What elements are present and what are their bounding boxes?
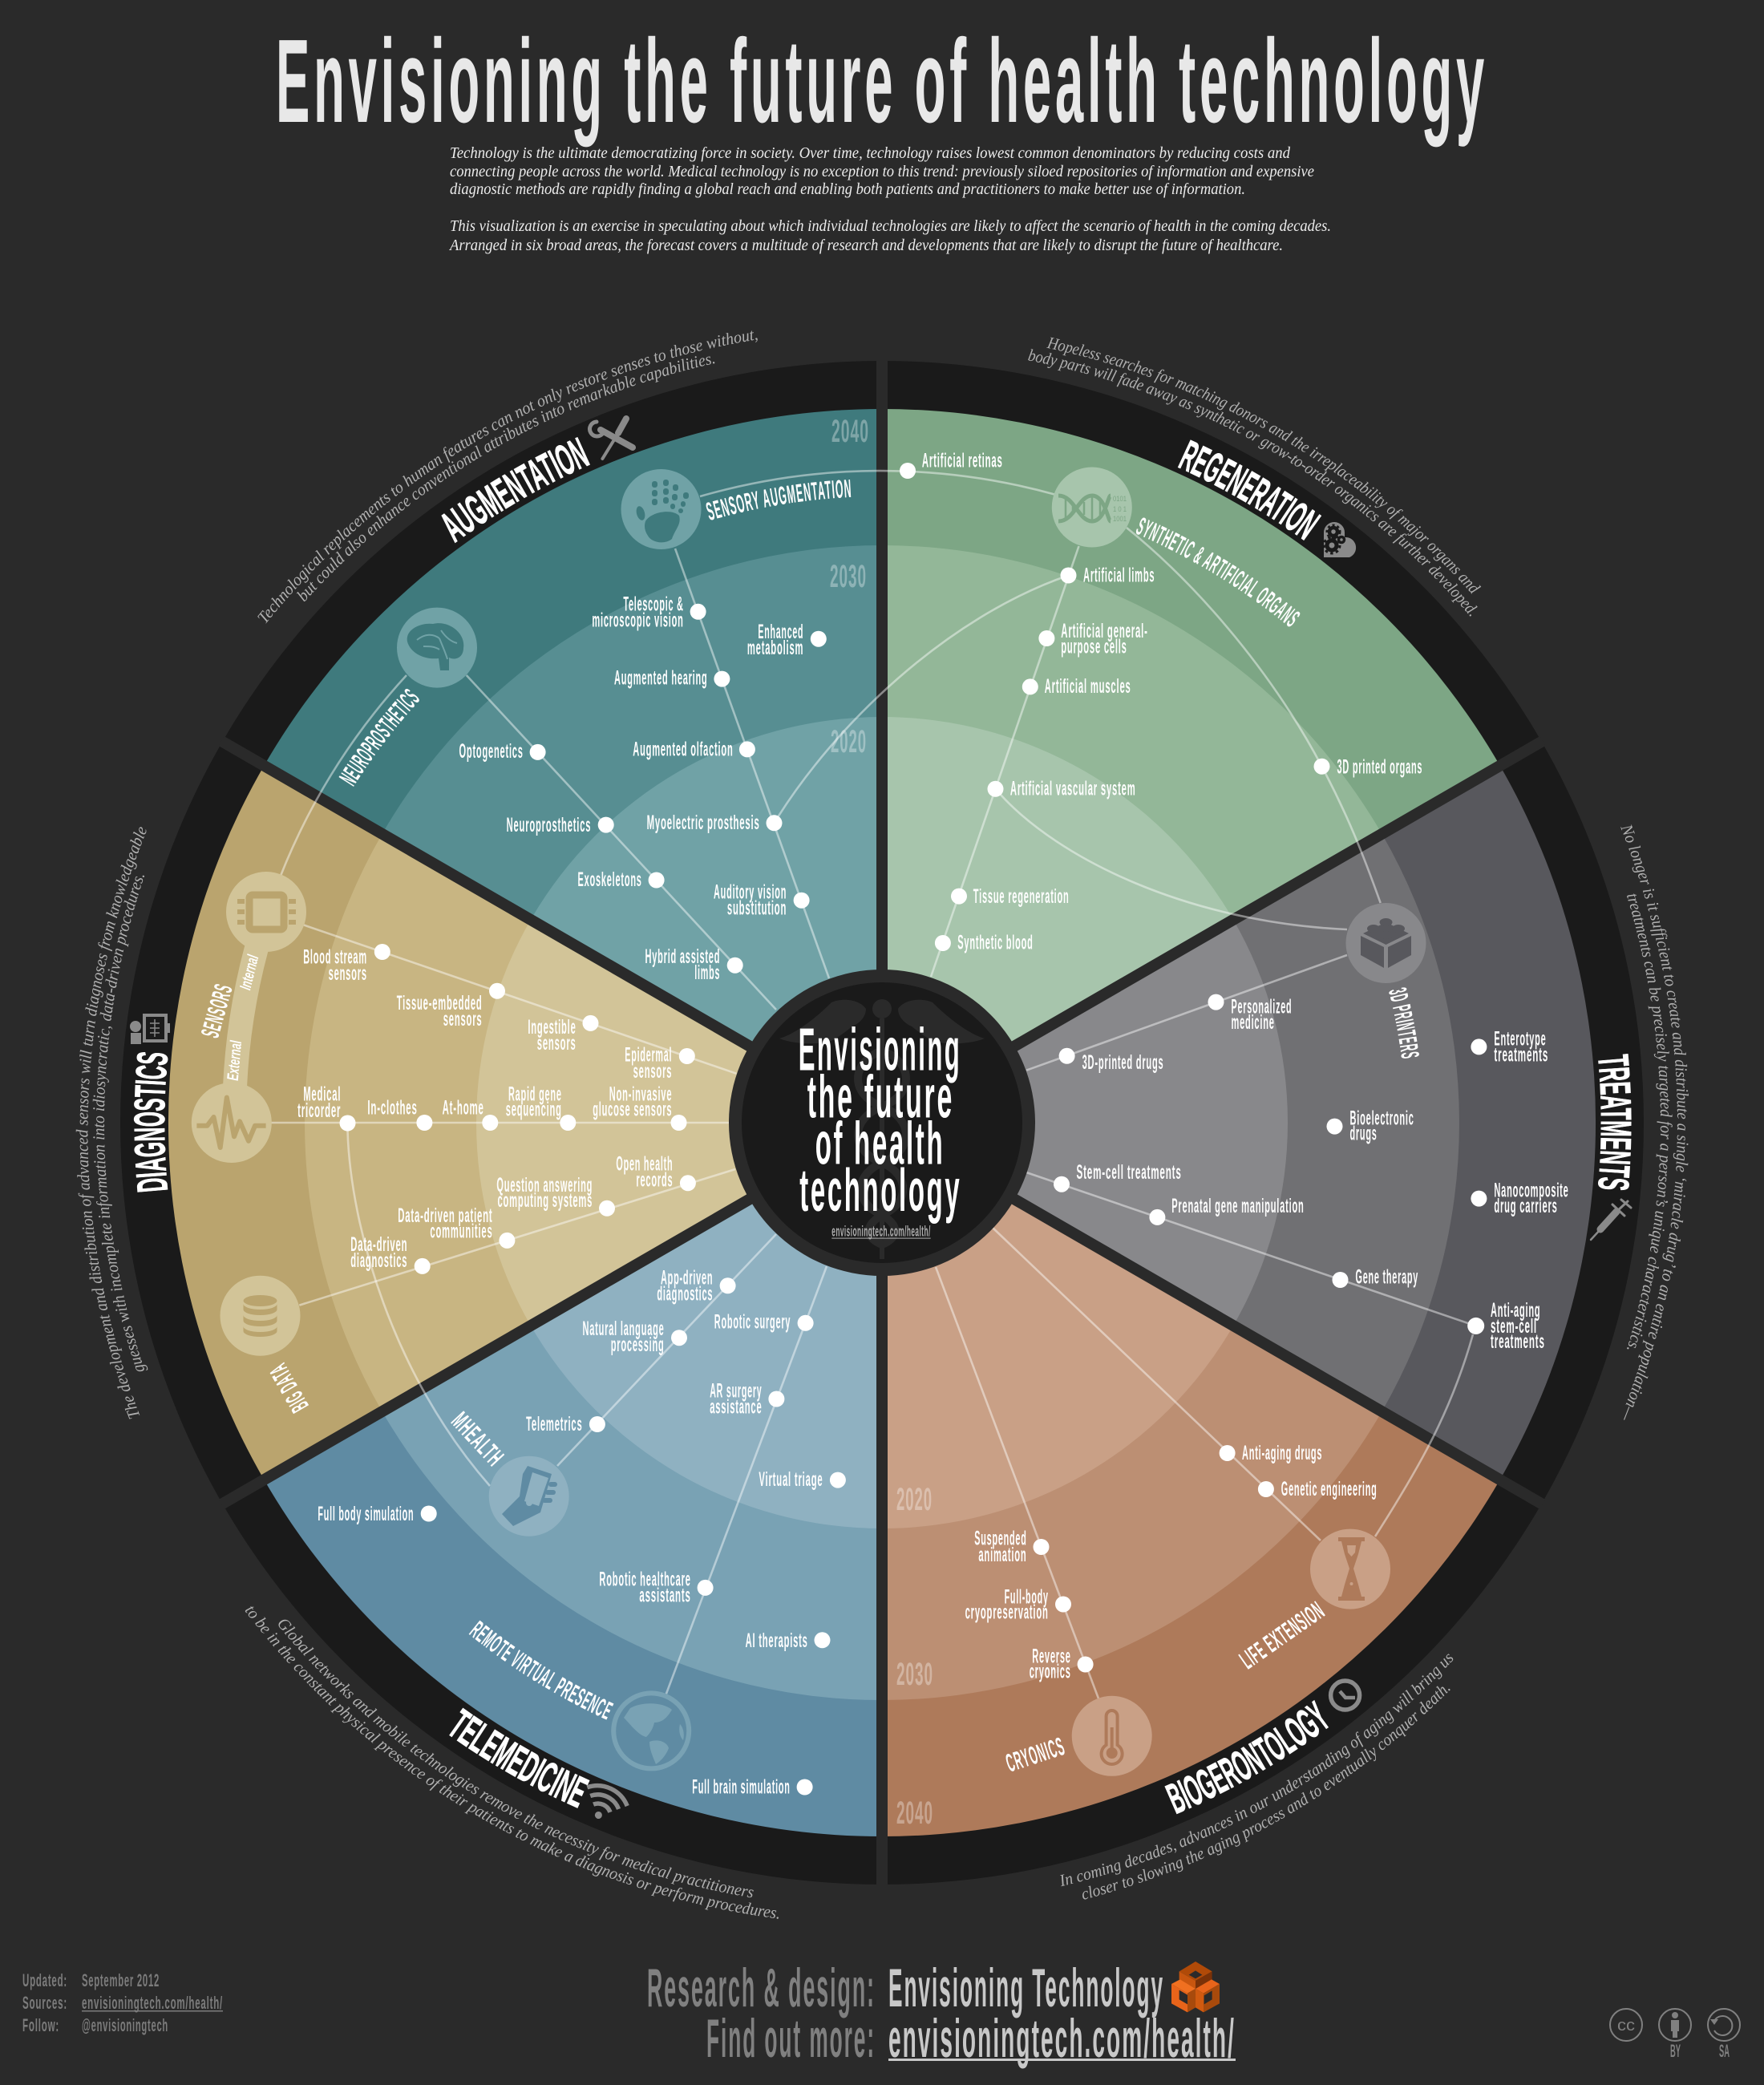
description: augmentation: but could also enhance conventional attributes into remarkable capabilities. xyxy=(297,356,715,601)
node: synthetic blood xyxy=(935,932,1034,954)
node: app-driven diagnostics xyxy=(657,1267,736,1306)
footer: credits xyxy=(647,1957,1236,2069)
node: non-invasive glucose sensors xyxy=(593,1083,686,1131)
footer: credits: Find out more: xyxy=(706,2008,876,2069)
node: augmented hearing xyxy=(614,667,730,690)
nodes: augmentation xyxy=(459,593,827,984)
nodes: treatments: treatments xyxy=(1491,1330,1545,1353)
node: reverse cryonics: Reverse xyxy=(1032,1646,1071,1668)
node: telemetrics xyxy=(526,1413,605,1435)
icon: creative commons license xyxy=(1610,2009,1740,2061)
icon: ecg wave xyxy=(192,1083,272,1163)
node: ar surgery assistance: assistance xyxy=(710,1395,762,1418)
year labels: 2030 xyxy=(830,559,867,594)
intro text: This visualization is an exercise in speculating about which individual technologies are likely to affect the scenario of health in the coming decades. xyxy=(450,217,1331,235)
node: natural language processing xyxy=(582,1318,687,1356)
node: 3d printed organs xyxy=(1313,755,1422,778)
node: ingestible sensors: Ingestible xyxy=(528,1016,577,1038)
nodes: treatments: Prenatal gene manipulation xyxy=(1171,1195,1305,1217)
footer: metadata: Follow: xyxy=(22,2015,59,2035)
band label: internal: Internal xyxy=(237,953,262,992)
section: telemedicine heading: TELEMEDICINE xyxy=(449,1708,590,1808)
nodes: regeneration: Artificial muscles xyxy=(1045,675,1131,698)
nodes: treatments: 3D-printed drugs xyxy=(1082,1051,1164,1074)
description: diagnostics: guesses with incomplete information into idiosyncratic, data-driven procedures. xyxy=(93,876,148,1371)
intro text: Technology is the ultimate democratizing force in society. Over time, technology raises lowest common denominators by reducing costs and xyxy=(450,144,1291,162)
icon: globe (remote virtual presence) xyxy=(611,1690,691,1771)
node: epidermal sensors xyxy=(625,1044,695,1083)
icon: clock xyxy=(1331,1681,1360,1710)
node: epidermal sensors: sensors xyxy=(633,1060,672,1083)
node: data-driven diagnostics xyxy=(350,1233,431,1274)
node: natural language processing: Natural language xyxy=(582,1318,665,1340)
node: data-driven patient communities: Data-driven patient xyxy=(398,1204,492,1227)
node: tissue-embedded sensors: sensors xyxy=(443,1008,483,1030)
node: enhanced metabolism xyxy=(747,621,827,659)
node: nanocomposite drug carriers xyxy=(1471,1179,1569,1217)
node: augmented hearing: Augmented hearing xyxy=(614,667,707,690)
center hub: envisioningtech.com/health/ xyxy=(831,1224,931,1240)
node: hybrid assisted limbs xyxy=(645,945,743,984)
node: personalized medicine: medicine xyxy=(1232,1011,1275,1034)
node: artificial retinas xyxy=(900,449,1003,479)
node: suspended animation xyxy=(974,1527,1049,1566)
description: telemedicine: Global networks and mobile technologies remove the necessity for medical practitioners xyxy=(279,1620,754,1897)
outer black ring xyxy=(120,361,1644,1885)
icon: thermometer (cryonics) xyxy=(1072,1696,1152,1776)
icon: cc: cc xyxy=(1617,2017,1635,2034)
node: telescopic and microscopic vision xyxy=(592,593,706,632)
nodes: treatments: Bioelectronic xyxy=(1350,1107,1414,1129)
node: rapid gene sequencing xyxy=(506,1083,576,1131)
node: optogenetics: Optogenetics xyxy=(459,740,524,763)
nodes: regeneration: Tissue regeneration xyxy=(973,885,1070,908)
node: bioelectronic drugs: drugs xyxy=(1350,1122,1378,1144)
section: diagnostics heading: DIAGNOSTICS xyxy=(133,1052,168,1192)
text: 2020 xyxy=(896,1482,933,1517)
node: full brain simulation xyxy=(692,1775,813,1798)
nodes: treatments: treatments xyxy=(1494,1043,1548,1066)
icon: wifi xyxy=(577,1779,631,1828)
node: reverse cryonics: cryonics xyxy=(1030,1660,1071,1682)
node: suspended animation: Suspended xyxy=(974,1527,1027,1549)
wedge: treatments xyxy=(882,766,1596,1480)
node: open health records: Open health xyxy=(616,1153,673,1176)
section: regeneration heading: REGENERATION xyxy=(1177,439,1321,540)
node: artificial general-purpose cells: purpose cells xyxy=(1061,635,1127,658)
node: ai therapists: AI therapists xyxy=(746,1630,808,1652)
node: blood stream sensors xyxy=(303,944,390,985)
section: biogerontology heading: BIOGERONTOLOGY xyxy=(1164,1700,1329,1814)
node: data-driven diagnostics: diagnostics xyxy=(350,1249,407,1272)
node: ai therapists xyxy=(746,1630,831,1652)
center url xyxy=(831,1224,931,1240)
section: treatments heading: TREATMENTS xyxy=(1598,1054,1632,1190)
text: LIFE EXTENSION xyxy=(1235,1596,1329,1674)
nodes: regeneration: Synthetic blood xyxy=(957,932,1034,954)
node: full body simulation: Full body simulation xyxy=(318,1503,414,1525)
branch label: 3d printers: 3D PRINTERS xyxy=(1389,987,1419,1059)
node: ingestible sensors xyxy=(528,1015,598,1055)
node: data-driven patient communities xyxy=(398,1204,515,1249)
branch label: synthetic and artificial organs: SYNTHETIC & ARTIFICIAL ORGANS xyxy=(1135,518,1301,627)
branch label: neuroprosthetics: NEUROPROSTHETICS xyxy=(338,689,419,787)
node: anti-aging drugs xyxy=(1220,1442,1322,1464)
node: data-driven patient communities: communities xyxy=(430,1221,492,1243)
node: anti-aging stem-cell treatments: stem-cell xyxy=(1491,1315,1537,1338)
node: augmented olfaction: Augmented olfaction xyxy=(633,738,733,760)
node: full body simulation xyxy=(318,1503,437,1525)
node: full-body cryopreservation xyxy=(965,1586,1071,1623)
icon: caduceus xyxy=(779,999,985,1259)
icon: by: BY xyxy=(1670,2041,1681,2061)
branch label: remote virtual presence: REMOTE VIRTUAL PRESENCE xyxy=(468,1620,614,1719)
node: hybrid assisted limbs: Hybrid assisted xyxy=(645,945,720,968)
icon: sa: SA xyxy=(1719,2041,1730,2061)
description: diagnostics: The development and distribution of advanced sensors will turn diagnoses from knowledgeable xyxy=(75,827,146,1419)
center hub: of health xyxy=(815,1110,945,1177)
icon: database (big data) xyxy=(220,1276,300,1356)
node: open health records xyxy=(616,1153,696,1192)
text: 2030 xyxy=(896,1657,933,1692)
nodes: biogerontology xyxy=(965,1442,1378,1682)
text: Envisioning Technology xyxy=(888,1957,1164,2018)
nodes: regeneration: Artificial limbs xyxy=(1083,565,1155,587)
description: biogerontology: In coming decades, advances in our understanding of aging will bring us xyxy=(1060,1654,1453,1886)
node: virtual triage xyxy=(759,1468,846,1491)
nodes: treatments: Stem-cell treatments xyxy=(1076,1161,1182,1184)
nodes: treatments: Gene therapy xyxy=(1355,1265,1418,1288)
wedge: regeneration xyxy=(882,409,1500,1123)
icon: hand (sensory augmentation) xyxy=(621,469,701,549)
node: prenatal gene manipulation xyxy=(1149,1195,1305,1225)
wedge: augmentation xyxy=(264,409,882,1123)
text: SENSORS xyxy=(196,981,238,1041)
center hub: the future xyxy=(807,1063,954,1130)
node: at-home xyxy=(443,1097,498,1131)
wedge: biogerontology xyxy=(882,1123,1500,1836)
node: blood stream sensors: Blood stream xyxy=(303,946,367,969)
footer: metadata: Sources: xyxy=(22,1993,67,2013)
node: tissue-embedded sensors: Tissue-embedded xyxy=(397,992,483,1014)
node: blood stream sensors: sensors xyxy=(329,962,367,985)
node: exoskeletons xyxy=(577,868,665,891)
icon: dna helix (synthetic organs): 1001 xyxy=(1113,515,1127,523)
node: app-driven diagnostics: App-driven xyxy=(661,1267,713,1289)
text: Genetic engineering xyxy=(1281,1478,1378,1500)
sensors connecting band xyxy=(235,948,257,1087)
node: personalized medicine xyxy=(1208,994,1292,1034)
footer: metadata: @envisioningtech xyxy=(82,2015,168,2035)
text: envisioningtech.com/health/ xyxy=(888,2008,1236,2069)
node: non-invasive glucose sensors: glucose sensors xyxy=(593,1098,672,1120)
node: artificial vascular system xyxy=(988,777,1135,800)
year labels: 2040 xyxy=(831,414,869,449)
intro text xyxy=(448,144,1331,254)
node: question answering computing systems: Question answering xyxy=(496,1174,593,1196)
node: anti-aging stem-cell treatments xyxy=(1467,1299,1545,1353)
footer: metadata: Updated: xyxy=(22,1970,67,1990)
node: neuroprosthetics xyxy=(507,814,614,836)
nodes: treatments xyxy=(1054,994,1569,1353)
node: ar surgery assistance xyxy=(710,1379,784,1418)
node: full-body cryopreservation: Full-body xyxy=(1005,1586,1049,1609)
icon: heart with gears xyxy=(1324,522,1356,557)
node: ar surgery assistance: AR surgery xyxy=(710,1379,762,1402)
nodes: regeneration: Artificial vascular system xyxy=(1010,777,1135,800)
text: CRYONICS xyxy=(1002,1731,1069,1778)
icon: lego brick (3d printers) xyxy=(1345,903,1426,983)
wedge: diagnostics xyxy=(168,766,882,1480)
intro text: diagnostic methods are rapidly finding a global reach and enabling both patients and practitioners to make better use of information. xyxy=(450,180,1245,198)
node: reverse cryonics xyxy=(1030,1646,1094,1682)
node: bioelectronic drugs xyxy=(1326,1107,1414,1144)
node: rapid gene sequencing: Rapid gene xyxy=(508,1083,562,1105)
node: robotic healthcare assistants: Robotic healthcare xyxy=(599,1569,691,1591)
node: augmented olfaction xyxy=(633,738,755,760)
node: medical tricorder xyxy=(297,1083,356,1131)
node: enhanced metabolism: Enhanced xyxy=(758,621,803,643)
node: myoelectric prosthesis xyxy=(647,812,783,834)
node: robotic surgery: Robotic surgery xyxy=(714,1311,791,1334)
nodes: regeneration: Artificial retinas xyxy=(922,449,1003,472)
footer: metadata: September 2012 xyxy=(82,1970,160,1990)
icon: tools xyxy=(590,419,633,459)
node: myoelectric prosthesis: Myoelectric prosthesis xyxy=(647,812,760,834)
icon: phone in hand (mhealth) xyxy=(489,1456,569,1536)
icon: syringe xyxy=(1591,1200,1631,1240)
footer: metadata xyxy=(22,1970,223,2035)
node: in-clothes xyxy=(367,1097,432,1131)
icon: envisioning technology logo xyxy=(1171,1962,1220,2012)
node: tissue regeneration xyxy=(951,885,1070,908)
center title xyxy=(799,1015,961,1224)
node: medical tricorder: Medical xyxy=(303,1083,341,1105)
description: treatments: treatments can be precisely targeted for a person’s unique characteristics. xyxy=(1627,893,1673,1349)
description: biogerontology: closer to slowing the aging process and to eventually conquer death. xyxy=(1082,1686,1450,1899)
node: open health records: records xyxy=(636,1169,673,1192)
center hub: Envisioning xyxy=(799,1015,961,1083)
description: regeneration: body parts will fade away as synthetic or grow-to-order organics are further developed. xyxy=(1028,349,1478,616)
description: telemedicine: to be in the constant physical presence of their patients to make a diagnosis or perform procedures. xyxy=(245,1606,779,1919)
footer: credits: Research & design: xyxy=(647,1957,876,2018)
nodes: telemedicine xyxy=(318,1267,846,1798)
text: Nanocomposite xyxy=(1494,1179,1569,1201)
text: 2040 xyxy=(896,1796,933,1831)
center hub xyxy=(729,970,1035,1276)
year labels: 2020 xyxy=(831,724,867,759)
node: stem-cell treatments xyxy=(1054,1161,1182,1192)
node: data-driven diagnostics: Data-driven xyxy=(350,1233,407,1256)
node: optogenetics xyxy=(459,740,546,763)
nodes: treatments: Personalized xyxy=(1232,996,1292,1018)
icon: dna helix (synthetic organs): 0101 xyxy=(1113,495,1127,503)
node: auditory vision substitution xyxy=(714,881,810,919)
node: question answering computing systems: computing systems xyxy=(497,1189,593,1212)
icon: sa xyxy=(1708,2009,1740,2061)
node: ingestible sensors: sensors xyxy=(537,1032,577,1055)
node: robotic healthcare assistants: assistants xyxy=(639,1585,691,1607)
footer: metadata: envisioningtech.com/health/ xyxy=(82,1993,223,2013)
node: robotic healthcare assistants xyxy=(599,1569,714,1607)
node: artificial limbs xyxy=(1060,565,1155,587)
text: BIG DATA xyxy=(263,1358,314,1417)
node: robotic surgery xyxy=(714,1311,814,1334)
text: 3D printed organs xyxy=(1337,755,1422,778)
node: medical tricorder: tricorder xyxy=(297,1099,341,1122)
nodes: regeneration xyxy=(900,449,1422,954)
node: in-clothes: In-clothes xyxy=(367,1097,418,1119)
node: tissue-embedded sensors xyxy=(397,983,505,1030)
icon: brain (neuroprosthetics) xyxy=(397,608,477,688)
node: enterotype treatments xyxy=(1471,1027,1548,1066)
section: augmentation heading: AUGMENTATION xyxy=(441,437,590,544)
node: enhanced metabolism: metabolism xyxy=(747,637,803,659)
nodes: regeneration: Artificial general- xyxy=(1061,620,1148,642)
center hub: technology xyxy=(799,1156,961,1224)
icon: hourglass (life extension) xyxy=(1310,1529,1390,1609)
branch label: mhealth: MHEALTH xyxy=(446,1407,510,1472)
node: epidermal sensors: Epidermal xyxy=(625,1044,672,1067)
node: telescopic and microscopic vision: Telescopic & xyxy=(623,593,684,616)
node: app-driven diagnostics: diagnostics xyxy=(657,1283,713,1306)
node: auditory vision substitution: Auditory vision xyxy=(714,881,787,903)
nodes: treatments: Enterotype xyxy=(1494,1027,1546,1050)
node: full brain simulation: Full brain simulation xyxy=(692,1775,791,1798)
intro text: connecting people across the world. Medical technology is no exception to this trend: previously siloed repositories of information and expensive xyxy=(450,163,1314,180)
node: suspended animation: animation xyxy=(978,1544,1027,1566)
band label: external: External xyxy=(225,1039,245,1081)
node: hybrid assisted limbs: limbs xyxy=(694,962,720,984)
node: non-invasive glucose sensors: Non-invasive xyxy=(609,1083,672,1105)
node: auditory vision substitution: substitution xyxy=(727,897,787,919)
icon: chip (sensors) xyxy=(226,872,306,952)
nodes: diagnostics xyxy=(297,944,696,1274)
description: augmentation: Technological replacements to human features can not only restore senses to those without, xyxy=(257,330,758,624)
nodes: treatments: Anti-aging xyxy=(1491,1299,1540,1322)
icon: dna helix (synthetic organs): 1 0 1 xyxy=(1113,505,1127,513)
icon: by xyxy=(1659,2009,1691,2061)
icon: x-ray machine xyxy=(130,1015,170,1044)
node: artificial muscles xyxy=(1022,675,1131,698)
node: nanocomposite drug carriers: drug carriers xyxy=(1494,1195,1558,1217)
node: telescopic and microscopic vision: microscopic vision xyxy=(592,609,684,632)
node: gene therapy xyxy=(1333,1265,1418,1288)
description: treatments: No longer is it sufficient to create and distribute a single ‘miracle drug’ to an entire population— xyxy=(1620,824,1689,1420)
node: genetic engineering xyxy=(1258,1478,1378,1500)
node: natural language processing: processing xyxy=(611,1334,665,1356)
icon: dna helix (synthetic organs) xyxy=(1052,467,1132,547)
nodes: biogerontology: Anti-aging drugs xyxy=(1242,1442,1322,1464)
node: neuroprosthetics: Neuroprosthetics xyxy=(507,814,591,836)
node: 3d-printed drugs xyxy=(1059,1048,1164,1074)
node: artificial general-purpose cells xyxy=(1038,620,1148,658)
description: regeneration: Hopeless searches for matching donors and the irreplaceability of major organs and xyxy=(1046,337,1482,594)
node: rapid gene sequencing: sequencing xyxy=(506,1098,562,1120)
year labels xyxy=(830,414,933,1831)
node: at-home: At-home xyxy=(443,1097,484,1119)
wedge: telemedicine xyxy=(264,1123,882,1836)
node: full-body cryopreservation: cryopreservation xyxy=(965,1601,1049,1623)
connector lines xyxy=(270,471,1476,1698)
icon: cc xyxy=(1610,2009,1642,2041)
node: telemetrics: Telemetrics xyxy=(526,1413,582,1435)
node: exoskeletons: Exoskeletons xyxy=(577,868,642,891)
node: question answering computing systems xyxy=(496,1174,615,1217)
node: virtual triage: Virtual triage xyxy=(759,1468,823,1491)
intro text: Arranged in six broad areas, the forecast covers a multitude of research and developments that are likely to disrupt the future of healthcare. xyxy=(448,237,1283,254)
branch label: sensory augmentation: SENSORY AUGMENTATION xyxy=(706,480,852,520)
